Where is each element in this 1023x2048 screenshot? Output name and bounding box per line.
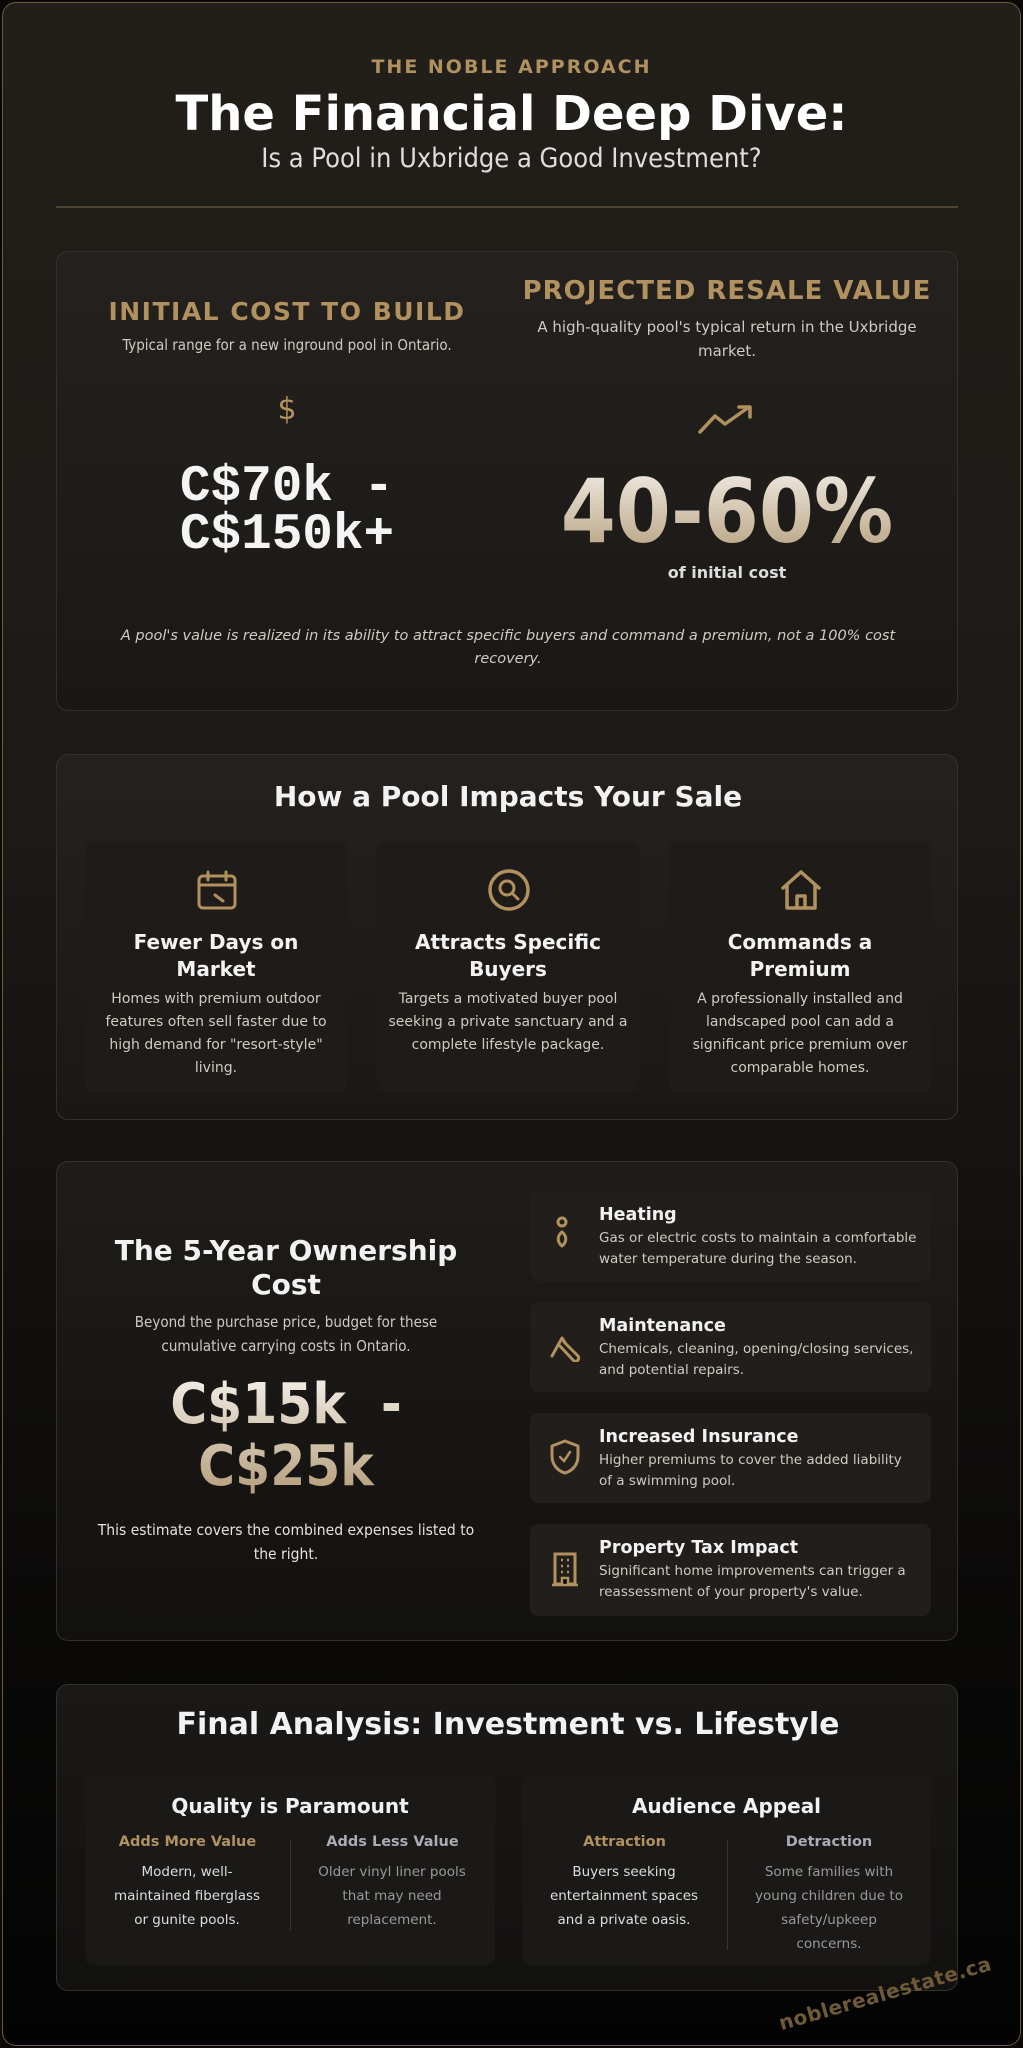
title — [415, 930, 601, 981]
card: fewer days — [85, 841, 347, 1092]
text: initial cost sub: Typical range for a new inground pool in Ontario. — [122, 336, 452, 354]
card: audience: Buyers seeking entertainment spaces and a private oasis. — [550, 1864, 698, 1928]
title: The Financial Deep Dive: — [176, 86, 847, 142]
card: specific buyers — [377, 841, 639, 1092]
row: maintenance: Chemicals, cleaning, opening/closing services, and potential repairs. — [599, 1341, 913, 1378]
row: maintenance: Maintenance — [599, 1316, 726, 1336]
figure: 15k-25k — [57, 1374, 515, 1498]
card: quality: Quality is Paramount — [171, 1794, 409, 1818]
card: audience — [522, 1774, 931, 1965]
icon: dollar: $ — [277, 392, 297, 427]
subtitle: Is a Pool in Uxbridge a Good Investment? — [261, 143, 762, 174]
title: Market — [176, 957, 256, 981]
title: Premium — [750, 957, 850, 981]
figure: 70k-150k: C$150k+ — [180, 507, 394, 564]
panel: sale impact — [56, 754, 958, 1120]
title: Fewer Days on — [134, 930, 298, 954]
icon: house — [781, 870, 821, 910]
eyebrow: THE NOBLE APPROACH — [371, 56, 652, 78]
title — [728, 930, 872, 981]
panel: cost and resale — [56, 251, 958, 711]
icon: calendar — [198, 870, 236, 910]
title: Attracts Specific — [415, 930, 601, 954]
row: insurance — [530, 1413, 931, 1503]
card: quality: Older vinyl liner pools that may need replacement. — [318, 1864, 466, 1928]
heading: resale: PROJECTED RESALE VALUE — [523, 276, 931, 306]
panel: final analysis — [56, 1684, 958, 1991]
desc: Targets a motivated buyer pool seeking a private sanctuary and a complete lifestyle package. — [389, 991, 627, 1053]
row: maintenance — [530, 1302, 931, 1392]
row: insurance: Increased Insurance — [599, 1427, 799, 1447]
icon: shield — [550, 1440, 580, 1474]
card: premium — [669, 841, 931, 1092]
panel: ownership cost — [56, 1161, 958, 1641]
icon: thermometer — [556, 1216, 568, 1248]
card: quality: Adds More Value — [119, 1834, 256, 1850]
icon: tools — [550, 1336, 580, 1362]
card: quality: Modern, well-maintained fiberglass or gunite pools. — [114, 1864, 260, 1928]
figure: 70k-150k — [180, 459, 394, 564]
row: heating: Heating — [599, 1205, 677, 1225]
note: A pool's value is realized in its ability to attract specific buyers and command a premium, not a 100% cost recovery. — [121, 628, 895, 667]
heading — [114, 1234, 457, 1301]
text: resale sub: A high-quality pool's typical return in the Uxbridge market. — [537, 318, 917, 360]
figure: 70k-150k: C$70k - — [180, 459, 394, 516]
row: insurance: Higher premiums to cover the added liability of a swimming pool. — [599, 1452, 902, 1489]
watermark: noblerealestate.ca — [776, 1951, 994, 2035]
heading: The 5-Year Ownership — [115, 1234, 457, 1267]
card: audience: Attraction — [583, 1834, 666, 1850]
heading: How a Pool Impacts Your Sale — [274, 780, 742, 813]
icon: trend — [698, 405, 752, 434]
figure: 40-60%: 40-60% — [561, 460, 893, 563]
text: estimate: This estimate covers the combined expenses listed to the right. — [98, 1521, 474, 1563]
row: property tax: Significant home improvements can trigger a reassessment of your property's value. — [599, 1563, 906, 1600]
icon: building — [552, 1552, 578, 1586]
text: of initial cost: of initial cost — [668, 563, 786, 582]
heading: Final Analysis: Investment vs. Lifestyle — [176, 1707, 840, 1742]
desc: Beyond the purchase price, budget for these cumulative carrying costs in Ontario. — [135, 1313, 437, 1355]
title: Buyers — [469, 957, 547, 981]
card: audience: Audience Appeal — [632, 1794, 821, 1818]
icon: search — [488, 869, 530, 911]
row: heating: Gas or electric costs to maintain a comfortable water temperature during the season. — [599, 1230, 916, 1267]
row: property tax — [530, 1524, 931, 1616]
figure: 15k-25k: C$25k — [198, 1434, 374, 1499]
desc: A professionally installed and landscaped pool can add a significant price premium over comparable homes. — [693, 991, 907, 1076]
card: quality: Adds Less Value — [326, 1834, 459, 1850]
row: heating — [530, 1191, 931, 1281]
row: property tax: Property Tax Impact — [599, 1538, 798, 1558]
title — [134, 930, 298, 981]
figure: 15k-25k: C$15k - — [170, 1372, 402, 1437]
desc: Homes with premium outdoor features often sell faster due to high demand for "resort-style" living. — [105, 991, 327, 1076]
card: quality — [85, 1774, 495, 1965]
title: Commands a — [728, 930, 872, 954]
card: audience: Detraction — [786, 1834, 872, 1850]
heading: initial cost: INITIAL COST TO BUILD — [108, 297, 466, 326]
card: audience: Some families with young children due to safety/upkeep concerns. — [755, 1864, 903, 1952]
heading: Cost — [251, 1268, 321, 1301]
